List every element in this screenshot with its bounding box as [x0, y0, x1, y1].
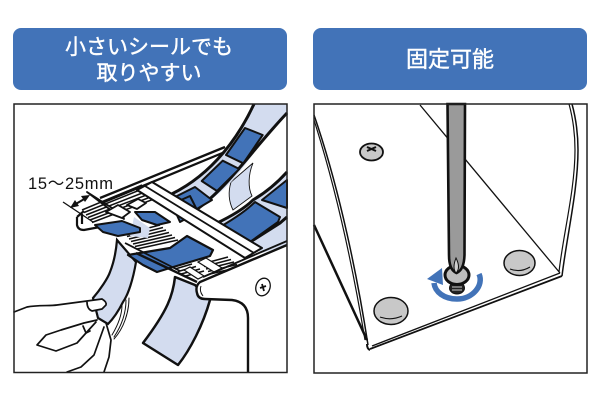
mounting screw top — [360, 144, 383, 160]
heading: easy to pick small labels — [13, 28, 287, 90]
label roll strip — [165, 104, 287, 214]
rubber foot left — [374, 298, 408, 324]
comb plate — [77, 185, 240, 276]
panel: label dispenser illustration — [14, 104, 287, 372]
blue labels on roll — [226, 128, 263, 163]
rotation arrow — [427, 268, 480, 299]
rail stubs near front edge — [184, 258, 222, 279]
rubber foot right — [504, 250, 535, 276]
lower hanging label strip — [143, 277, 210, 365]
panel: underside mounting illustration — [314, 104, 587, 373]
screwdriver — [448, 104, 465, 273]
comb teeth lower rows — [125, 225, 240, 276]
heading: easy to pick small labels: 取りやすい — [96, 62, 202, 85]
dimension label and arrow — [28, 175, 113, 222]
panel border: dispenser — [14, 104, 287, 372]
heading: can be fixed: 固定可能 — [406, 47, 494, 72]
back arm of dispenser — [100, 147, 226, 202]
white guide rails — [87, 182, 262, 258]
large blue tab being peeled — [128, 236, 213, 272]
screw — [253, 276, 273, 298]
dispenser body — [125, 241, 287, 372]
heading: easy to pick small labels: 小さいシールでも — [65, 36, 233, 59]
heading: can be fixed — [313, 28, 587, 90]
dimension label and arrow: 15～25mm — [28, 175, 113, 193]
screw being fastened — [445, 266, 469, 294]
hand-held label strip — [93, 240, 136, 324]
hand — [14, 298, 129, 372]
small blue tabs — [95, 196, 198, 238]
second label strip — [215, 172, 287, 253]
cabinet edges — [314, 104, 578, 350]
panel border: mounting — [314, 104, 587, 373]
